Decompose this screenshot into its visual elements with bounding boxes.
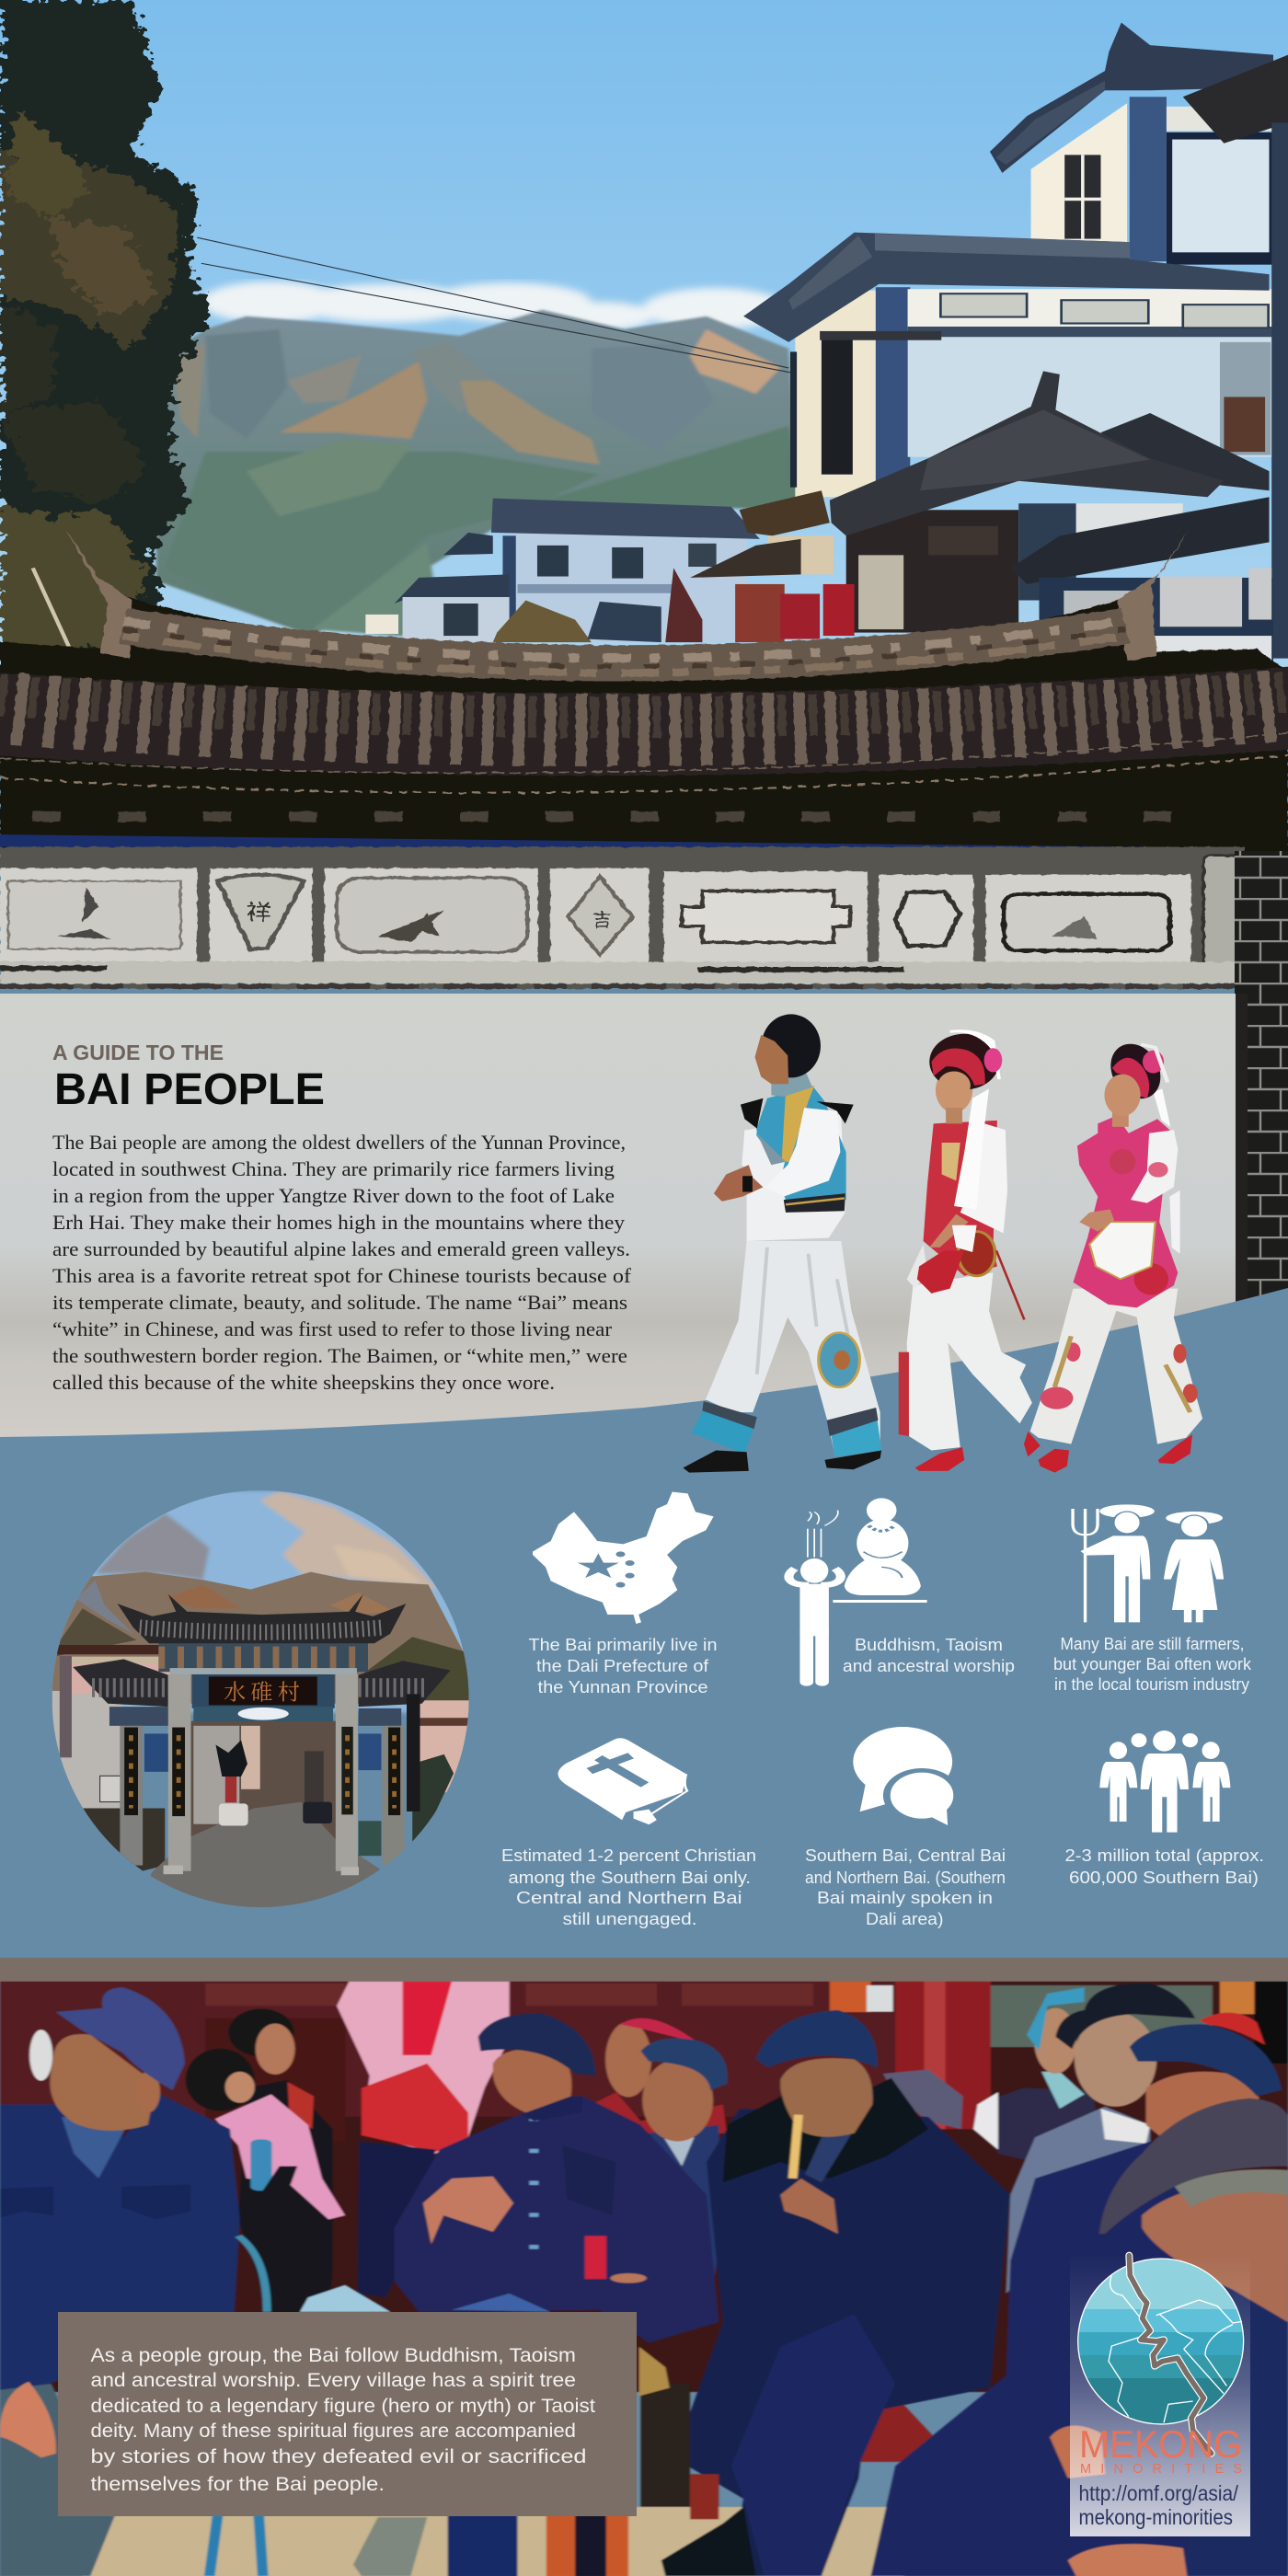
painted wall frieze: 吉	[593, 910, 611, 930]
man behind in grey cap	[883, 2070, 962, 2129]
icon: group of people	[1099, 1731, 1230, 1833]
gate name board	[192, 1673, 335, 1721]
text: Christian percentage: Central and Northern Bai	[516, 1889, 742, 1907]
caption text	[90, 2344, 595, 2495]
woman holding child	[29, 2008, 345, 2314]
icon: Bible with cross	[558, 1738, 687, 1824]
intro body text: “white” in Chinese, and was first used to refer to those living near	[52, 1317, 613, 1340]
text: languages: Bai mainly spoken in	[817, 1889, 993, 1907]
top photo: Bai village and mountains	[0, 0, 1288, 989]
text: Christian percentage: still unengaged.	[563, 1910, 697, 1928]
logo url: mekong-minorities	[1078, 2505, 1233, 2529]
mountain range	[156, 310, 801, 639]
blue stripe under the eaves	[0, 834, 1195, 860]
text: religion: Buddhism, Taoism	[855, 1636, 1003, 1654]
logo url: http://omf.org/asia/	[1078, 2481, 1239, 2505]
tree trunk	[33, 568, 70, 649]
caption text: and ancestral worship. Every village has a spirit tree	[90, 2369, 576, 2391]
intro body text: Erh Hai. They make their homes high in the mountains where they	[52, 1211, 625, 1234]
hands at bottom right	[1050, 2426, 1187, 2576]
woman in red	[899, 1031, 1041, 1471]
stool, chair legs and boot	[210, 2347, 719, 2576]
intro body text: located in southwest China. They are primarily rice farmers living	[52, 1157, 615, 1180]
text: languages: and Northern Bai. (Southern	[805, 1869, 1006, 1887]
snowy mountains	[52, 1572, 469, 1704]
text: languages: Dali area)	[866, 1910, 944, 1928]
clouds over the peaks	[201, 282, 787, 330]
woman in red headscarf	[583, 2018, 727, 2137]
small man with direct gaze	[640, 2037, 729, 2276]
man at far left in cap	[0, 1987, 390, 2576]
text: where the Bai live	[528, 1636, 718, 1696]
foreground curved roof	[0, 529, 1288, 852]
man with pipe in dark coat	[661, 2010, 1010, 2576]
main building upper tower	[990, 23, 1288, 265]
sky and clouds	[52, 1490, 469, 1712]
text: Christian percentage: Estimated 1-2 percent Christian	[501, 1846, 756, 1865]
text: occupation	[1053, 1635, 1252, 1694]
intro body text: This area is a favorite retreat spot for Chinese tourists because of	[52, 1264, 632, 1287]
caption text: by stories of how they defeated evil or sacrificed	[90, 2445, 587, 2467]
icon: map of China with stars	[533, 1492, 714, 1624]
text: religion: and ancestral worship	[843, 1657, 1015, 1675]
main building second floor	[743, 122, 1288, 659]
chair under the pipe smoker	[859, 2405, 934, 2463]
tree	[0, 0, 210, 652]
text: Christian percentage	[501, 1846, 756, 1928]
ground	[82, 2507, 903, 2576]
caption text: dedicated to a legendary figure (hero or myth) or Taoist	[90, 2395, 595, 2417]
text: occupation: but younger Bai often work	[1053, 1655, 1252, 1673]
seated man in navy jacket	[395, 2013, 719, 2342]
intro body text: its temperate climate, beauty, and solitude. The name “Bai” means	[52, 1291, 627, 1314]
logo backing panel	[1070, 2254, 1250, 2536]
dark pillar strip	[1236, 994, 1248, 1311]
intro body text	[52, 1131, 632, 1394]
taupe divider band	[0, 1958, 1288, 1982]
title: a guide to the: A GUIDE TO THE	[52, 1041, 224, 1064]
sky	[0, 0, 1288, 710]
text: where the Bai live: the Dali Prefecture of	[536, 1657, 709, 1675]
logo globe and river	[1078, 2256, 1244, 2454]
logo tagline: MINORITIES	[1080, 2462, 1242, 2477]
text: where the Bai live: The Bai primarily live in	[528, 1636, 718, 1654]
intro body text: are surrounded by beautiful alpine lakes and emerald green valleys.	[52, 1237, 630, 1260]
text: religion	[843, 1636, 1015, 1675]
icons and captions	[501, 1492, 1264, 1928]
intro body text: in a region from the upper Yangtze River down to the foot of Lake	[52, 1184, 615, 1207]
logo url	[1078, 2481, 1239, 2529]
painted wall frieze: 祥	[247, 900, 271, 925]
man in black hat	[1006, 1984, 1265, 2294]
main gate roof	[118, 1594, 406, 1674]
three Bai people in traditional dress	[683, 1014, 1202, 1473]
woman in pink jacket	[337, 1982, 510, 2297]
painted wall frieze	[0, 846, 1245, 989]
Mekong Minorities logo	[1070, 2254, 1250, 2536]
title: Bai people: BAI PEOPLE	[54, 1065, 325, 1114]
foreground man with grey cap	[1098, 2098, 1288, 2322]
caption text: As a people group, the Bai follow Buddhism, Taoism	[90, 2344, 576, 2366]
woman in blue headscarf	[973, 1987, 1097, 2162]
man in white and blue	[683, 1014, 881, 1473]
left and right village buildings	[52, 1645, 469, 1843]
logo wordmark: MEKONG	[1079, 2422, 1242, 2466]
plaster wall panel	[0, 994, 1236, 1450]
bottom photo: elderly Bai men seated	[0, 1982, 1288, 2576]
woman in pink	[1030, 1040, 1202, 1473]
circular photo: Bai village gate	[52, 1490, 469, 1910]
side roofs of the gate	[73, 1659, 451, 1726]
icon: farmer couple with pitchfork	[1073, 1504, 1224, 1622]
text: languages: Southern Bai, Central Bai	[805, 1846, 1006, 1865]
intro body text: called this because of the white sheepskins they once wore.	[52, 1371, 555, 1394]
gate name board: 水碓村	[224, 1674, 300, 1707]
power lines	[197, 237, 870, 387]
icon: worshipper before Buddha statue	[788, 1498, 927, 1686]
text: population: 600,000 Southern Bai)	[1069, 1869, 1259, 1887]
intro body text: the southwestern border region. The Baimen, or “white men,” were	[52, 1344, 627, 1367]
text: population	[1065, 1846, 1264, 1887]
text: where the Bai live: the Yunnan Province	[537, 1678, 708, 1696]
text: Christian percentage: among the Southern Bai only.	[508, 1869, 751, 1887]
caption text: themselves for the Bai people.	[90, 2473, 385, 2495]
blue curved background	[0, 1288, 1288, 1969]
red carved doors	[0, 1982, 1288, 2392]
man on right with navy cap	[870, 2024, 1288, 2576]
caption box	[58, 2312, 637, 2516]
caption text: deity. Many of these spiritual figures are accompanied	[90, 2420, 576, 2442]
intro body text: The Bai people are among the oldest dwellers of the Yunnan Province,	[52, 1131, 626, 1154]
text: languages	[805, 1846, 1006, 1928]
text: occupation: in the local tourism industry	[1054, 1675, 1249, 1694]
main building lower roofs and shopfront	[665, 371, 1273, 665]
gate pillars with banners	[120, 1674, 420, 1875]
brick pillar at right edge	[1235, 851, 1288, 1311]
distant white house	[365, 499, 760, 642]
text: occupation: Many Bai are still farmers,	[1060, 1635, 1244, 1653]
icon: speech bubbles	[853, 1727, 957, 1825]
text: population: 2-3 million total (approx.	[1065, 1846, 1264, 1865]
street, cars and alley	[83, 1720, 381, 1908]
